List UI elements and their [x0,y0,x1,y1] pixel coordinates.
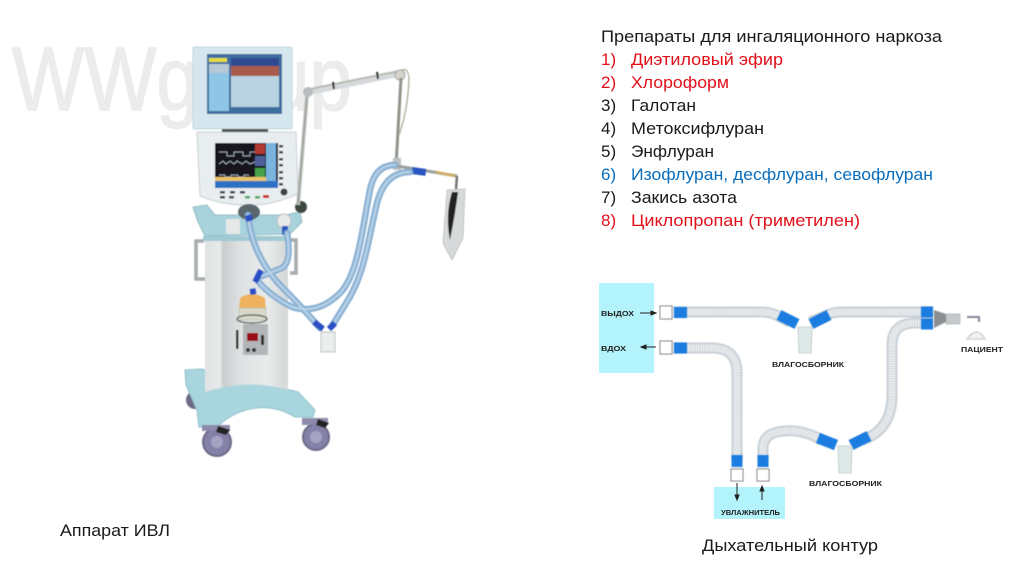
list item 1: Диэтиловый эфир [631,50,783,69]
list item 2: 2) [601,73,616,92]
corrugated tubes [673,312,933,460]
list item 4: 4) [601,119,616,138]
list item 8: 8) [601,211,616,230]
list item 3: Галотан [631,96,696,115]
icon: cart column with handles [196,236,296,396]
text block: anesthetic drugs list [601,27,943,230]
list item 4: Метоксифлуран [631,119,764,138]
label: patient: ПАЦИЕНТ [961,345,1003,354]
icon: ventilator tubing [248,165,410,328]
watermark: WWgroup [12,30,352,130]
icon: support arm [298,70,457,205]
icon: cart base [185,369,315,427]
panel: exhale and inhale box [599,283,654,373]
label: exhale: ВЫДОХ [601,309,634,318]
list item 7: 7) [601,188,616,207]
caption: breathing circuit: Дыхательный контур [702,536,878,555]
list item 7: Закись азота [631,188,738,207]
icon: upper display monitor [193,47,292,132]
list item 5: Энфлуран [631,142,714,161]
icon: tube connectors and water trap [248,215,335,352]
list item 2: Хлороформ [631,73,729,92]
list item 5: 5) [601,142,616,161]
water traps [798,327,852,473]
heading: drugs: Препараты для ингаляционного наркоза [601,27,943,46]
label: inhale: ВДОХ [601,344,626,353]
list item 6: 6) [601,165,616,184]
list item 3 [601,96,696,115]
icon: humidifier [236,294,268,355]
illustration: ventilator machine [185,47,465,456]
list item 3: 3) [601,96,616,115]
icon: front tray [193,205,302,241]
icon: wheels [202,418,329,456]
label: moisture trap top: ВЛАГОСБОРНИК [772,360,844,369]
list item 6: Изофлуран, десфлуран, севофлуран [631,165,933,184]
icon: breathing bag [443,189,465,260]
list item 8: Циклопропан (триметилен) [631,211,860,230]
connectors [660,306,769,481]
icon: patient mask [934,310,986,340]
blue tube cuffs [674,312,933,467]
label: humidifier: УВЛАЖНИТЕЛЬ [721,508,781,517]
diagram: breathing circuit [599,283,1003,519]
arrows [640,311,764,500]
icon: lower monitor unit [197,132,307,220]
list item 1: 1) [601,50,616,69]
caption: ventilator: Аппарат ИВЛ [60,521,170,540]
panel: humidifier box [714,487,785,519]
label: moisture trap bottom: ВЛАГОСБОРНИК [809,479,882,488]
